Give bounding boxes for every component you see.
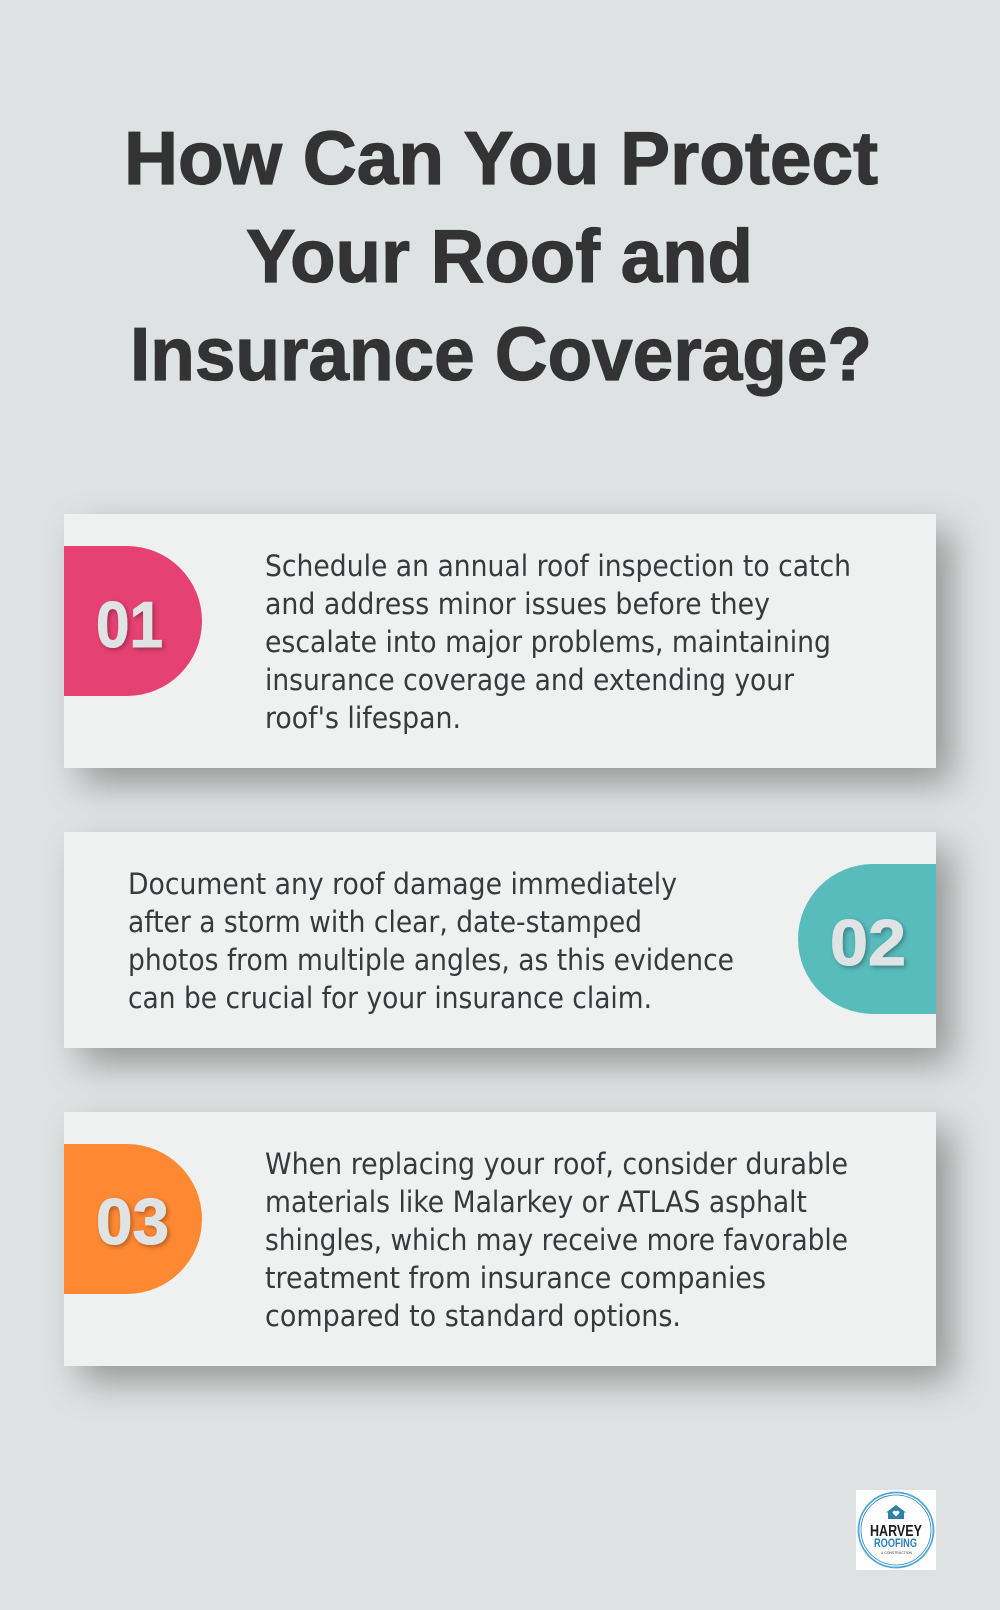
badge: 02: 02	[830, 906, 906, 979]
text: step 03: treatment from insurance companies	[265, 1261, 766, 1295]
text: step 03: shingles, which may receive more favorable	[265, 1223, 848, 1257]
logo: Harvey Roofing & Construction	[856, 1490, 936, 1570]
text: step 01	[265, 549, 851, 735]
text: step 01: insurance coverage and extending your	[265, 663, 794, 697]
text: step 03: materials like Malarkey or ATLAS asphalt	[265, 1185, 807, 1219]
logo: Harvey Roofing & Construction: & CONSTRUCTION	[881, 1550, 912, 1555]
text: step 01: roof's lifespan.	[265, 701, 461, 735]
icon: house with heart	[886, 1505, 906, 1519]
badge: 03	[64, 1144, 202, 1294]
text: step 03	[265, 1147, 848, 1333]
text: step 02: can be crucial for your insurance claim.	[128, 981, 652, 1015]
badge: 01	[64, 546, 202, 696]
logo: Harvey Roofing & Construction: HARVEY	[870, 1523, 922, 1540]
text: step 01: escalate into major problems, maintaining	[265, 625, 831, 659]
text: step 02: after a storm with clear, date-stamped	[128, 905, 642, 939]
title: Insurance Coverage?	[130, 312, 872, 396]
badge: 02	[798, 864, 936, 1014]
text: step 01: Schedule an annual roof inspection to catch	[265, 549, 851, 583]
text: step 03: When replacing your roof, consider durable	[265, 1147, 848, 1181]
text: step 02	[128, 867, 734, 1015]
text: step 02: Document any roof damage immediately	[128, 867, 677, 901]
logo: Harvey Roofing & Construction: ROOFING	[874, 1536, 917, 1550]
title: How Can You Protect	[124, 116, 878, 200]
panel: step 01	[64, 514, 936, 768]
badge: 01: 01	[96, 588, 163, 661]
badge: 03: 03	[96, 1185, 169, 1258]
text: step 03: compared to standard options.	[265, 1299, 681, 1333]
panel: step 02	[64, 832, 936, 1048]
text: step 02: photos from multiple angles, as this evidence	[128, 943, 734, 977]
title: Your Roof and	[246, 214, 753, 298]
panel: step 03	[64, 1112, 936, 1366]
text: step 01: and address minor issues before they	[265, 587, 770, 621]
title	[124, 116, 878, 396]
